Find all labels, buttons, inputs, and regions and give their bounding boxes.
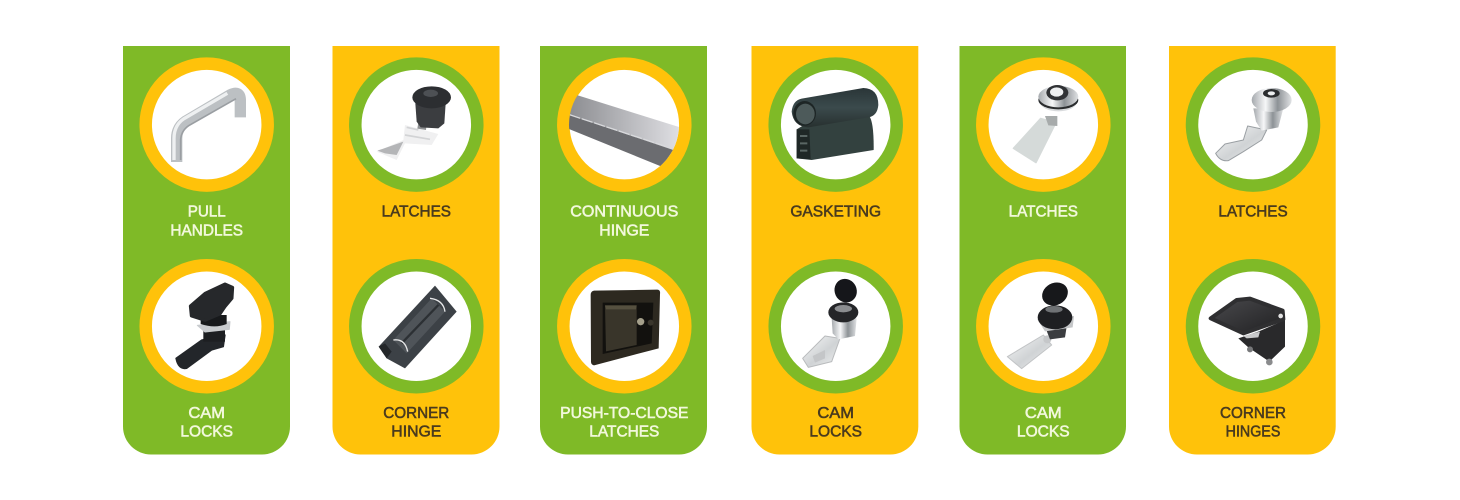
badge ring: cam locks	[146, 265, 268, 387]
label: continuous hinge	[570, 204, 678, 239]
label: cam locks: LOCKS	[809, 424, 862, 440]
panel: gasketing and cam locks	[752, 46, 918, 454]
icon: continuous hinge	[565, 95, 683, 167]
icon: black knob latch	[377, 86, 451, 160]
panel background	[540, 46, 707, 454]
badge ring: corner hinges	[1192, 265, 1314, 387]
badge ring: latches	[982, 64, 1104, 186]
label: corner hinges: HINGES	[1226, 424, 1280, 440]
panel background	[960, 46, 1126, 454]
label: gasketing: GASKETING	[790, 204, 881, 221]
label: push-to-close latches: PUSH-TO-CLOSE	[560, 405, 688, 422]
label: cam locks: LOCKS	[180, 424, 233, 440]
icon: push-to-close latch	[591, 290, 660, 365]
badge ring: pull handles	[146, 64, 268, 186]
panel: latches and corner hinges	[1169, 46, 1336, 454]
panel: pull handles and cam locks	[123, 46, 290, 454]
label: continuous hinge: HINGE	[599, 222, 649, 239]
label: cam locks: LOCKS	[1017, 424, 1070, 440]
label: corner hinges	[1220, 405, 1286, 440]
label: cam locks: CAM	[188, 405, 225, 422]
badge ring: push-to-close latches	[563, 265, 685, 387]
icon: chrome square-key latch	[1013, 85, 1078, 163]
label: pull handles: PULL	[188, 204, 226, 221]
icon: cam lock with key	[803, 275, 861, 367]
label: corner hinge	[383, 405, 449, 440]
label: corner hinges: CORNER	[1220, 405, 1286, 422]
label: pull handles	[170, 204, 243, 239]
badge ring: corner hinge	[355, 265, 477, 387]
label: latches: LATCHES	[1218, 204, 1288, 221]
panel: continuous hinge and push-to-close latches	[540, 46, 707, 454]
badge ring: latches	[1192, 64, 1314, 186]
label: corner hinge: CORNER	[383, 405, 449, 422]
icon: cam lock with black key	[1007, 278, 1074, 369]
panel background	[123, 46, 290, 454]
label: pull handles: HANDLES	[170, 222, 243, 239]
icon: corner hinges	[1211, 299, 1285, 365]
label: cam locks: CAM	[1025, 405, 1062, 422]
label: corner hinge: HINGE	[391, 424, 441, 440]
panel: latches and cam locks	[960, 46, 1126, 454]
icon: pull handle	[174, 93, 240, 162]
label: cam locks	[1017, 405, 1070, 440]
label: latches: LATCHES	[1009, 204, 1078, 221]
label: push-to-close latches	[560, 405, 688, 440]
label: push-to-close latches: LATCHES	[589, 424, 659, 440]
label: cam locks	[809, 405, 862, 440]
icon: chrome latch	[1216, 88, 1292, 161]
icon: gasket	[792, 88, 878, 160]
label: continuous hinge: CONTINUOUS	[570, 204, 678, 221]
icon: black cam lock	[176, 284, 233, 369]
badge ring: latches	[355, 64, 477, 186]
label: cam locks: CAM	[817, 405, 854, 422]
icon: corner hinge	[379, 286, 457, 368]
badge ring: cam locks with key	[775, 265, 897, 387]
panel: latches and corner hinge	[332, 46, 500, 454]
panel background	[332, 46, 500, 454]
panel background	[1169, 46, 1336, 454]
badge ring: gasketing	[775, 64, 897, 186]
label: latches: LATCHES	[382, 204, 451, 221]
badge ring: continuous hinge	[563, 64, 685, 186]
panel background	[752, 46, 918, 454]
label: cam locks	[180, 405, 233, 440]
badge ring: cam locks	[982, 265, 1104, 387]
